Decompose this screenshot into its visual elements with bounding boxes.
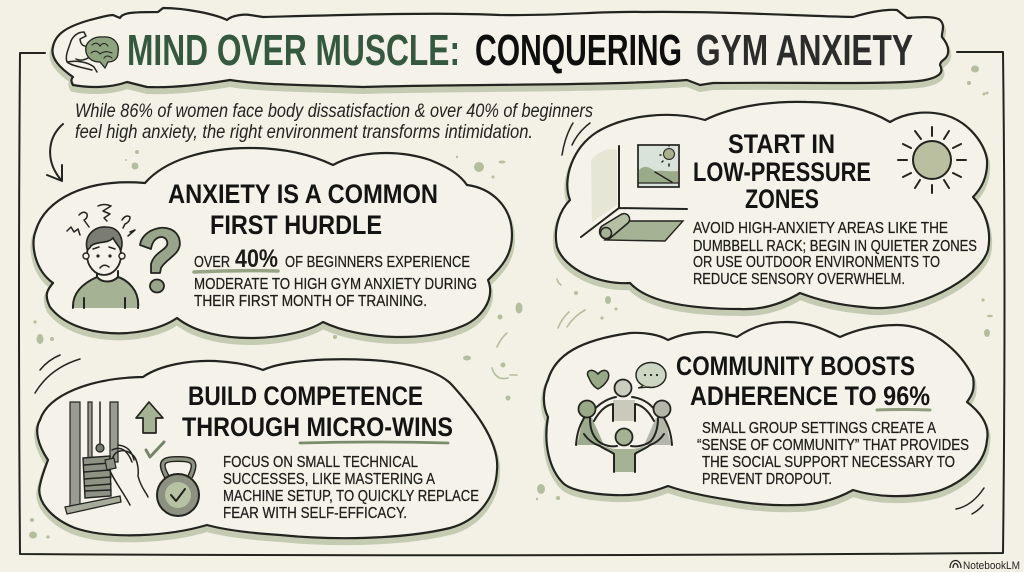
body text: “SENSE OF COMMUNITY” THAT PROVIDES bbox=[697, 437, 969, 454]
swoosh marks above lower left panel bbox=[35, 355, 80, 393]
body text bbox=[223, 454, 479, 522]
title text bbox=[127, 27, 913, 75]
intro text: While 86% of women face body dissatisfaction & over 40% of beginners bbox=[75, 101, 593, 122]
body text: FEAR WITH SELF-EFFICACY. bbox=[223, 505, 407, 522]
title text: GYM ANXIETY bbox=[696, 27, 913, 75]
body text with highlighted statistic: OF BEGINNERS EXPERIENCE bbox=[285, 254, 470, 271]
icon: up arrow bbox=[136, 402, 163, 433]
swoosh marks bbox=[956, 488, 984, 514]
heading bbox=[693, 129, 871, 214]
body text: MACHINE SETUP, TO QUICKLY REPLACE bbox=[223, 488, 479, 505]
title banner bbox=[52, 8, 948, 91]
icon: large question mark bbox=[140, 228, 180, 273]
panel: start in low-pressure zones bbox=[556, 102, 989, 313]
body text: FOCUS ON SMALL TECHNICAL bbox=[223, 454, 418, 471]
body text: SMALL GROUP SETTINGS CREATE A bbox=[702, 420, 936, 437]
body text with highlighted statistic bbox=[194, 245, 477, 310]
heading: ZONES bbox=[745, 184, 819, 214]
heading: ANXIETY IS A COMMON bbox=[168, 179, 438, 209]
intro text bbox=[75, 101, 593, 143]
heading with underline bbox=[182, 381, 453, 443]
icon: quiet room with window and yoga mat bbox=[581, 145, 687, 241]
body text: SUCCESSES, LIKE MASTERING A bbox=[223, 471, 435, 488]
body text bbox=[693, 220, 977, 288]
heading: FIRST HURDLE bbox=[210, 210, 382, 240]
icon: check mark bbox=[146, 442, 164, 457]
heading with underlined statistic: COMMUNITY BOOSTS bbox=[676, 351, 915, 381]
icon: cable machine with hand bbox=[65, 402, 148, 514]
title text: CONQUERING bbox=[475, 27, 682, 75]
body text bbox=[697, 420, 969, 488]
panel: community boosts adherence to 96% bbox=[544, 322, 988, 509]
panel: build competence through micro-wins bbox=[37, 359, 497, 542]
icon: sun bbox=[898, 127, 966, 193]
heading with underline: BUILD COMPETENCE bbox=[188, 381, 423, 411]
arrow: intro to first panel bbox=[47, 124, 63, 181]
icon: anxious person with question marks bbox=[67, 204, 180, 308]
body text with highlighted statistic: MODERATE TO HIGH GYM ANXIETY DURING bbox=[194, 276, 477, 293]
panel: anxiety is a common first hurdle bbox=[34, 148, 512, 342]
body text with highlighted statistic: THEIR FIRST MONTH OF TRAINING. bbox=[194, 293, 427, 310]
swoosh marks bbox=[562, 123, 590, 155]
body text: PREVENT DROPOUT. bbox=[702, 471, 832, 488]
body text with highlighted statistic: 40% bbox=[235, 245, 278, 273]
body text: REDUCE SENSORY OVERWHELM. bbox=[693, 271, 905, 288]
body text with highlighted statistic: OVER bbox=[194, 254, 230, 271]
icon: kettlebell with check bbox=[157, 459, 199, 516]
heading with underlined statistic bbox=[676, 351, 930, 411]
icon: people in a support circle bbox=[576, 362, 672, 472]
heading with underline: THROUGH MICRO-WINS bbox=[182, 412, 453, 442]
heading: START IN bbox=[728, 129, 835, 159]
body text: THE SOCIAL SUPPORT NECESSARY TO bbox=[702, 454, 955, 471]
notebooklm credit: NotebookLM bbox=[963, 560, 1020, 572]
heading: LOW-PRESSURE bbox=[693, 157, 871, 187]
intro text: feel high anxiety, the right environment transforms intimidation. bbox=[75, 122, 533, 143]
heading with underlined statistic: ADHERENCE TO 96% bbox=[690, 381, 930, 411]
body text: OR USE OUTDOOR ENVIRONMENTS TO bbox=[693, 254, 940, 271]
title text: MIND OVER MUSCLE: bbox=[127, 27, 460, 75]
icon: flexed arm with brain bbox=[66, 32, 118, 72]
body text: AVOID HIGH-ANXIETY AREAS LIKE THE bbox=[693, 220, 948, 237]
heading bbox=[168, 179, 438, 240]
